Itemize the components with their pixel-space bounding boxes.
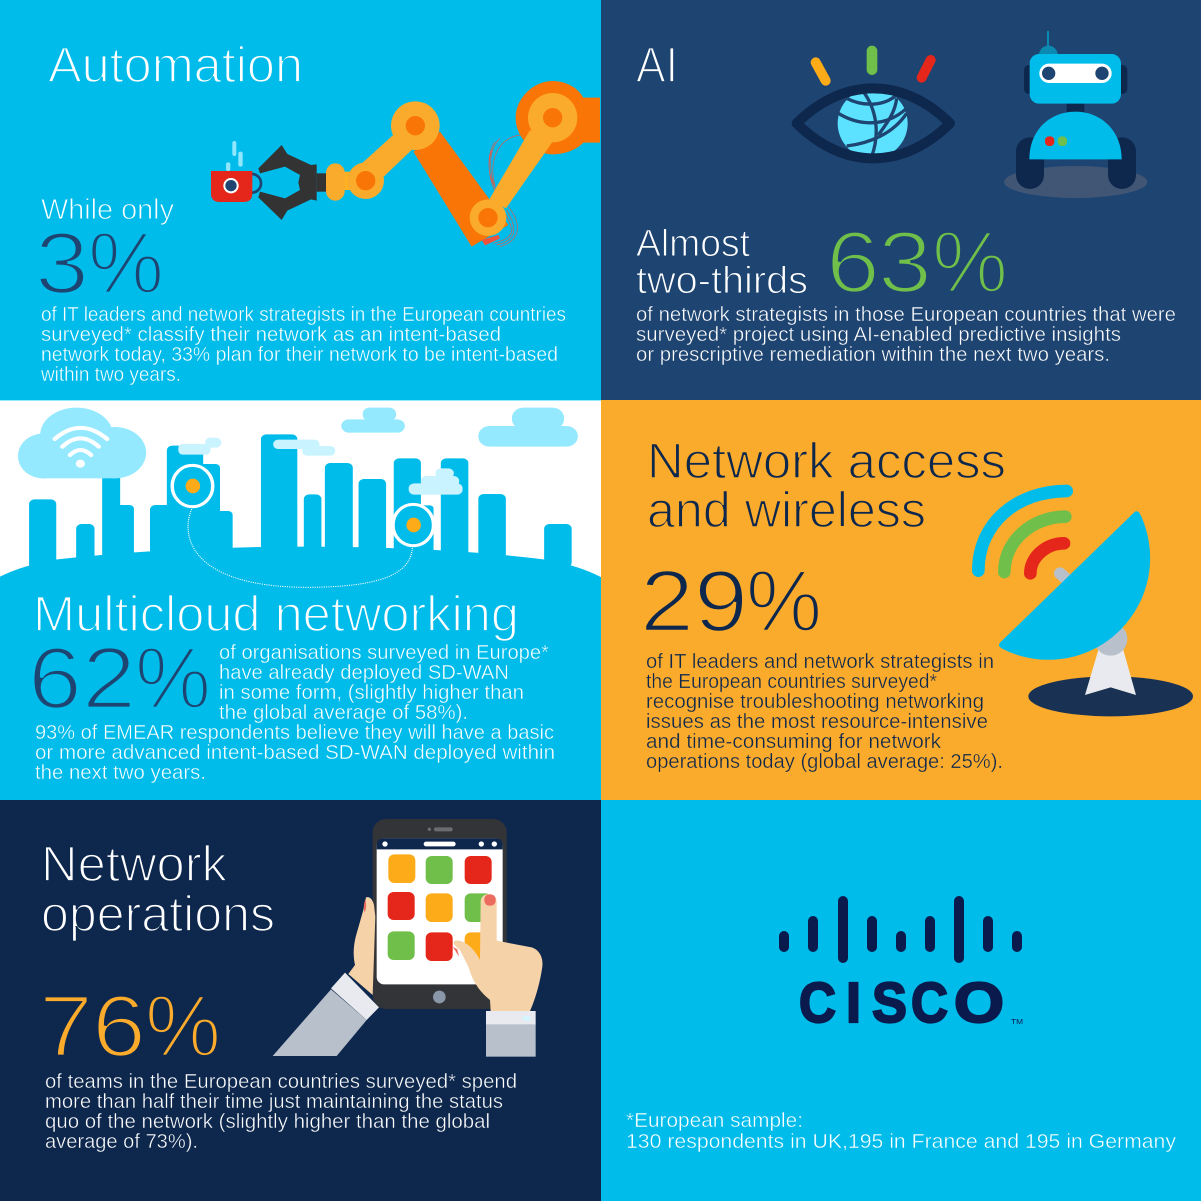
AI body text: of network strategists in those European countries that were [636, 304, 1176, 326]
logo: cisco: I [846, 971, 861, 1035]
panel: network access and wireless [601, 400, 1201, 800]
logo: cisco: C [799, 971, 836, 1035]
stat: 29%: % [746, 553, 822, 650]
multicloud body text [35, 642, 555, 784]
network operations title [41, 836, 275, 942]
stat: 76% [39, 978, 221, 1075]
footnote: *European sample: [626, 1110, 803, 1132]
almost two-thirds lead-in: two-thirds [636, 260, 808, 302]
illustration: city skyline with clouds [0, 408, 600, 607]
network operations title: operations [41, 886, 275, 942]
panel: AI [601, 0, 1201, 400]
multicloud body text: the global average of 58%). [219, 702, 468, 724]
panel: cisco logo and footnote [601, 800, 1201, 1201]
icon: robot [1004, 31, 1147, 198]
logo: cisco: S [872, 971, 907, 1035]
AI body text: surveyed* project using AI-enabled predictive insights [636, 324, 1121, 346]
icon: satellite dish with signal [978, 491, 1193, 716]
illustration: hands holding tablet [273, 819, 543, 1057]
multicloud body text: the next two years. [35, 762, 206, 784]
AI title: AI [636, 37, 678, 93]
footnote: 130 respondents in UK,195 in France and 195 in Germany [626, 1131, 1176, 1153]
network access title: Network access [647, 433, 1006, 489]
network access title [647, 433, 1006, 538]
automation body text: of IT leaders and network strategists in the European countries [41, 304, 566, 326]
stat: 62%: 6 [28, 630, 82, 727]
stat: 63%: % [932, 214, 1008, 311]
almost two-thirds lead-in [636, 223, 808, 302]
stat: 76%: % [145, 978, 221, 1075]
network access body text [646, 651, 1003, 773]
stat: 29%: 9 [694, 553, 748, 650]
network operations body text [45, 1071, 517, 1153]
logo: cisco: TM [1011, 1019, 1023, 1026]
stat: 63% [826, 214, 1008, 311]
icon: wifi cloud [18, 408, 146, 478]
network access body text: issues as the most resource-intensive [646, 711, 988, 733]
stat: 3%: 3 [35, 215, 89, 312]
AI body text: or prescriptive remediation within the next two years. [636, 344, 1110, 366]
network access body text: the European countries surveyed* [646, 671, 937, 693]
network operations body text: of teams in the European countries surveyed* spend [45, 1071, 517, 1093]
stat: 76%: 6 [92, 978, 146, 1075]
icon: robot arm with coffee cup [211, 81, 600, 247]
network access body text: of IT leaders and network strategists in [646, 651, 994, 673]
automation title: Automation [48, 37, 303, 93]
stat: 62%: % [135, 630, 211, 727]
network operations title: Network [41, 836, 228, 892]
stat: 3%: % [88, 215, 164, 312]
stat: 29%: 2 [640, 553, 694, 650]
almost two-thirds lead-in: Almost [636, 223, 750, 265]
stat: 63%: 3 [878, 214, 932, 311]
stat: 76%: 7 [39, 978, 93, 1075]
network access body text: operations today (global average: 25%). [646, 751, 1003, 773]
network operations body text: quo of the network (slightly higher than the global [45, 1111, 490, 1133]
multicloud title: Multicloud networking [33, 586, 519, 642]
multicloud body text: have already deployed SD-WAN [219, 662, 509, 684]
stat: 63%: 6 [826, 214, 880, 311]
automation body text: within two years. [40, 364, 181, 386]
network operations body text: average of 73%). [45, 1131, 198, 1153]
stat: 29% [640, 553, 822, 650]
stat: 62% [28, 630, 211, 727]
panel: automation [0, 0, 601, 400]
network access body text: recognise troubleshooting networking [646, 691, 984, 713]
AI body text [636, 304, 1176, 366]
stat: 3% [35, 215, 164, 312]
stat: 62%: 2 [82, 630, 136, 727]
automation body text [40, 304, 566, 386]
multicloud body text: or more advanced intent-based SD-WAN deployed within [35, 742, 555, 764]
logo: cisco [779, 896, 1023, 1035]
footnote [626, 1110, 1176, 1153]
network operations body text: more than half their time just maintaining the status [45, 1091, 503, 1113]
panel: network operations [0, 800, 601, 1201]
logo: cisco: C [911, 971, 948, 1035]
network access title: and wireless [647, 482, 926, 538]
icon: eye with globe [797, 51, 950, 158]
automation body text: network today, 33% plan for their network to be intent-based [41, 344, 558, 366]
multicloud body text: in some form, (slightly higher than [219, 682, 524, 704]
logo: cisco: O [954, 971, 1004, 1035]
automation body text: surveyed* classify their network as an intent-based [41, 324, 501, 346]
network access body text: and time-consuming for network [646, 731, 942, 753]
multicloud body text: of organisations surveyed in Europe* [219, 642, 549, 664]
multicloud body text: 93% of EMEAR respondents believe they will have a basic [35, 722, 554, 744]
panel: multicloud networking [0, 400, 601, 800]
while only lead-in: While only [41, 194, 174, 226]
